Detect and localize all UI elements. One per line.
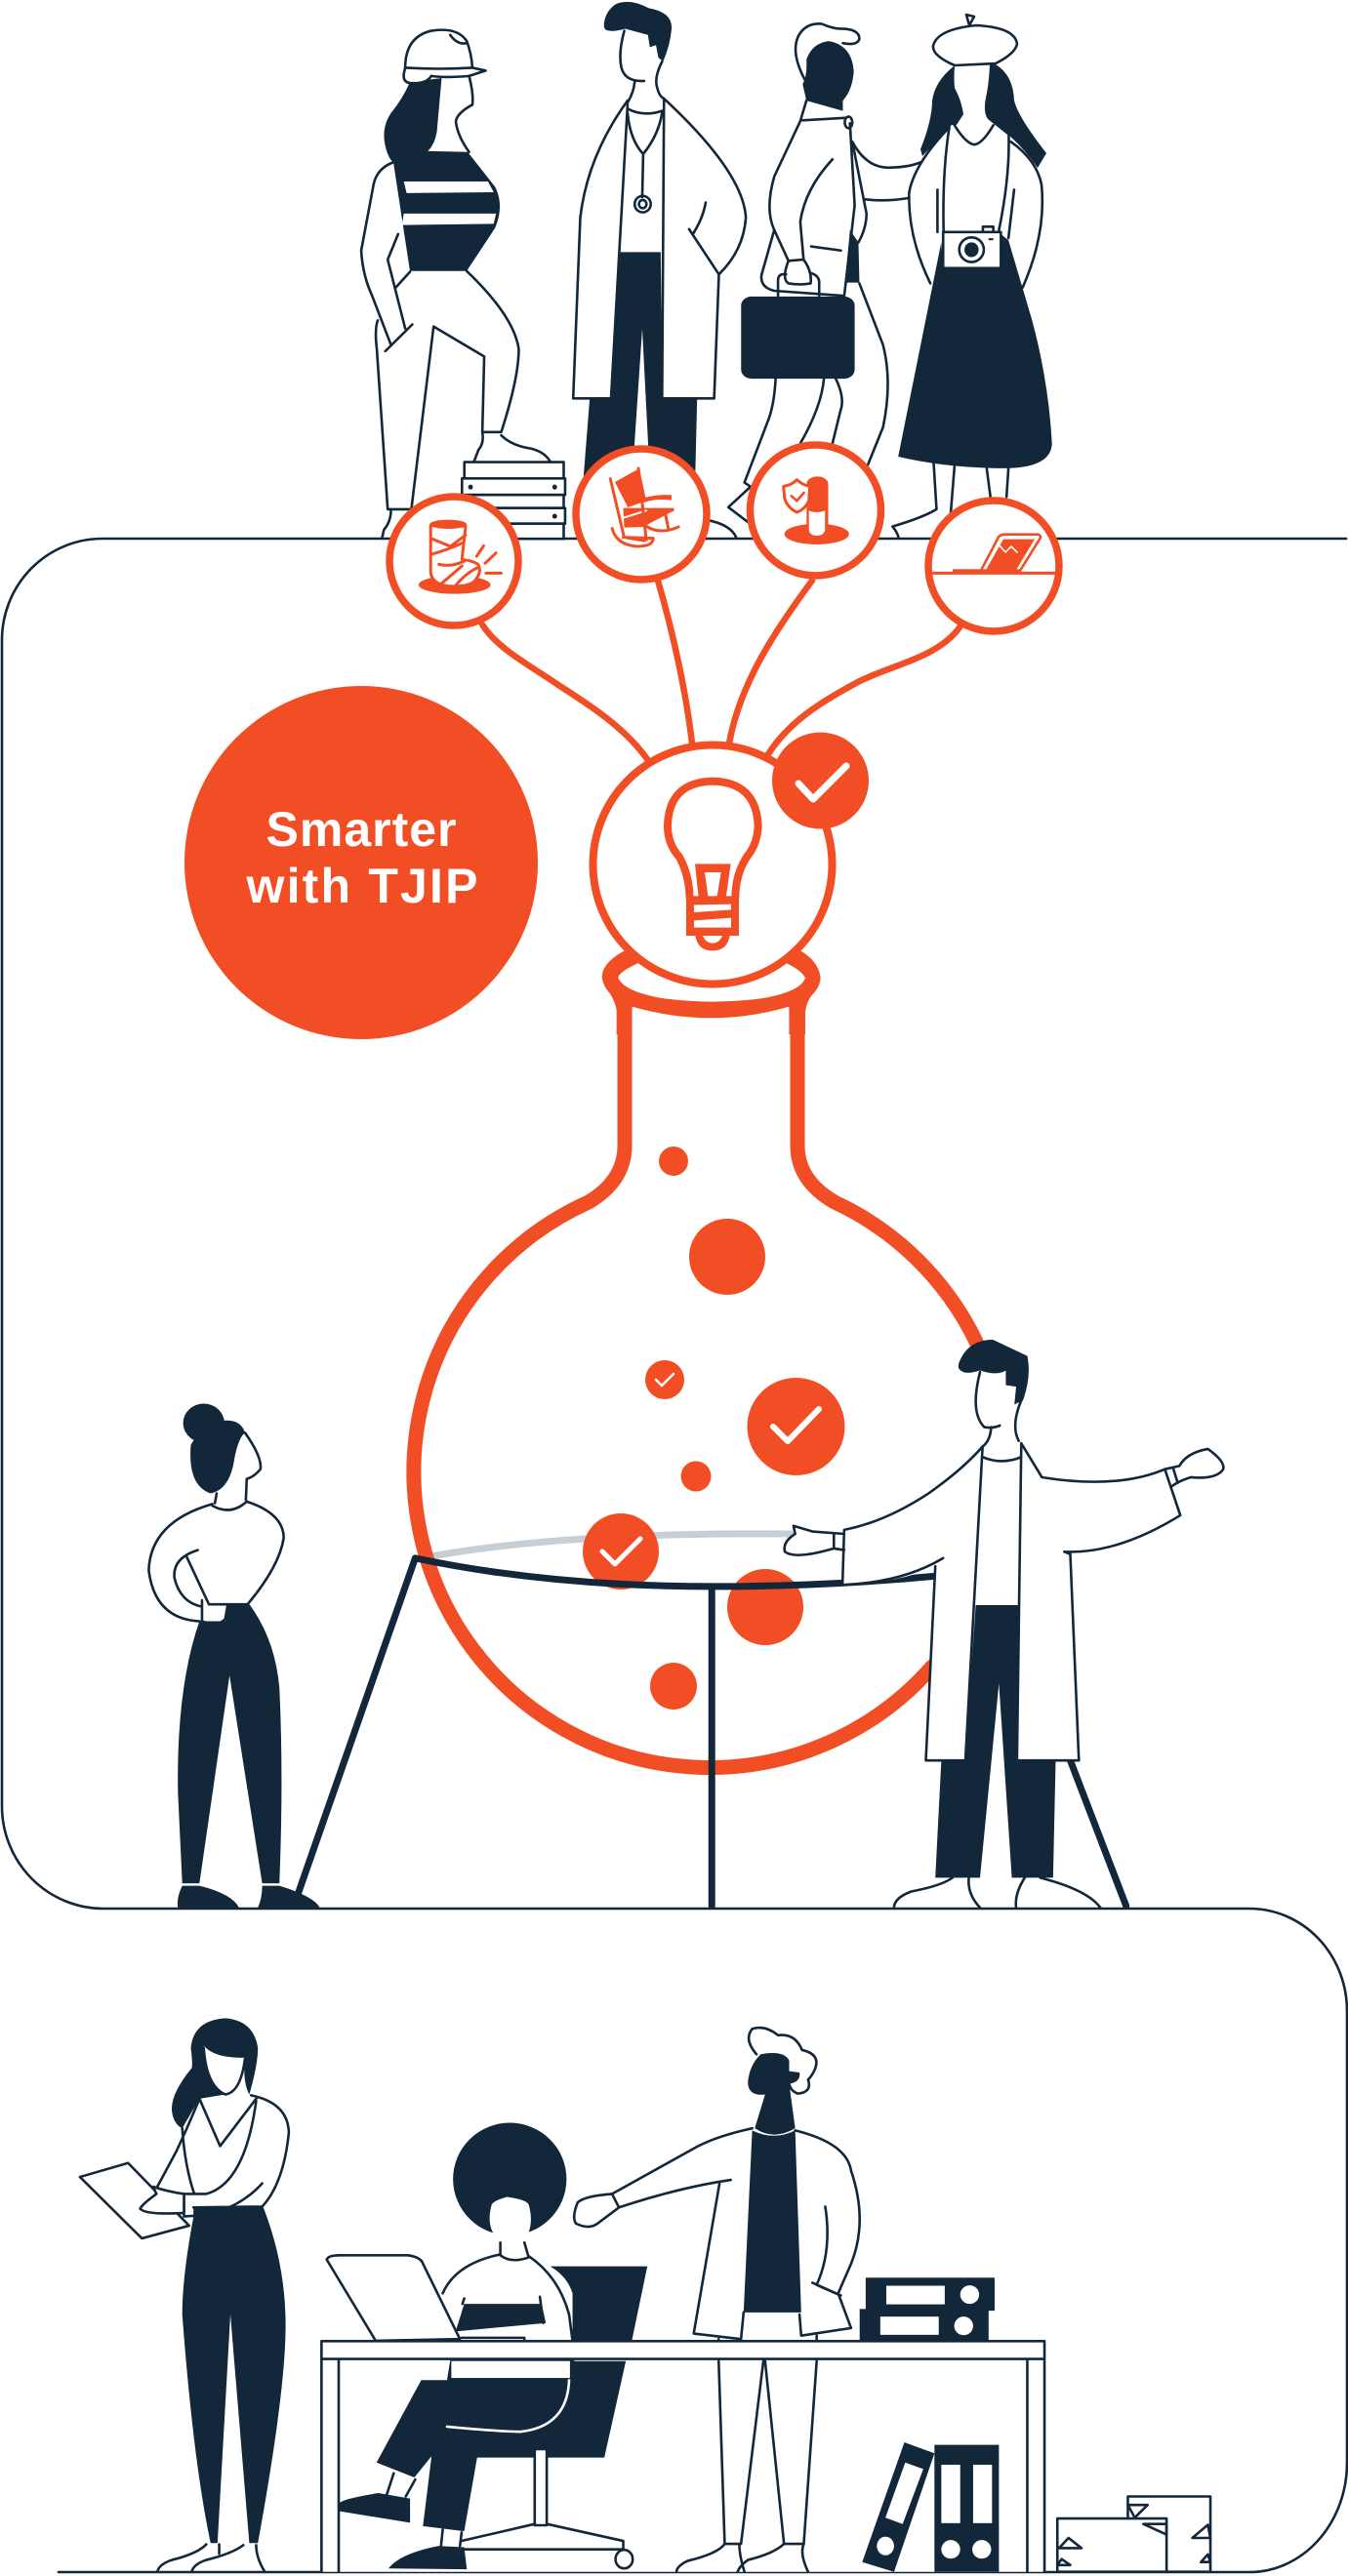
connector lines [482,581,960,759]
title badge [184,686,538,1039]
icon circle: leg cast [389,497,518,625]
person: standing man in coat [574,2028,860,2572]
seated legs and chair [340,2359,633,2569]
icon: light bulb [668,782,758,950]
group: bottom office scene [80,2018,1210,2572]
desk [321,2341,1044,2572]
person: seated with afro [443,2123,573,2341]
person: doctor with stethoscope [573,2,746,476]
bubbles [583,1147,845,1710]
title badge: with TJIP [246,859,478,913]
stack of books [462,463,565,539]
person: scientist in lab coat [785,1340,1223,1908]
icon circle: laptop [928,501,1059,631]
group: top people [361,2,920,539]
icon circle: pill and shield [750,445,880,576]
laptop [327,2255,460,2341]
title: Smarter [266,802,457,857]
group: flask scene [148,686,1223,1908]
icon circle: rocking chair [576,449,707,580]
bulb circle [593,745,832,984]
check badge [772,732,869,829]
person: woman in hard hat [361,30,551,538]
table back ring [421,1534,791,1558]
person: woman watching [148,1404,320,1908]
person: woman with beret and camera [892,15,1052,538]
person: man with briefcase [711,23,920,538]
frame outline [2,539,1347,2572]
cardboard boxes [1057,2497,1210,2572]
table stand [297,1558,1126,1906]
person: woman with clipboard [80,2018,289,2572]
flask [414,950,976,1767]
binders under desk [862,2442,999,2572]
binders on desk [860,2277,995,2341]
office chair back [551,2267,647,2341]
